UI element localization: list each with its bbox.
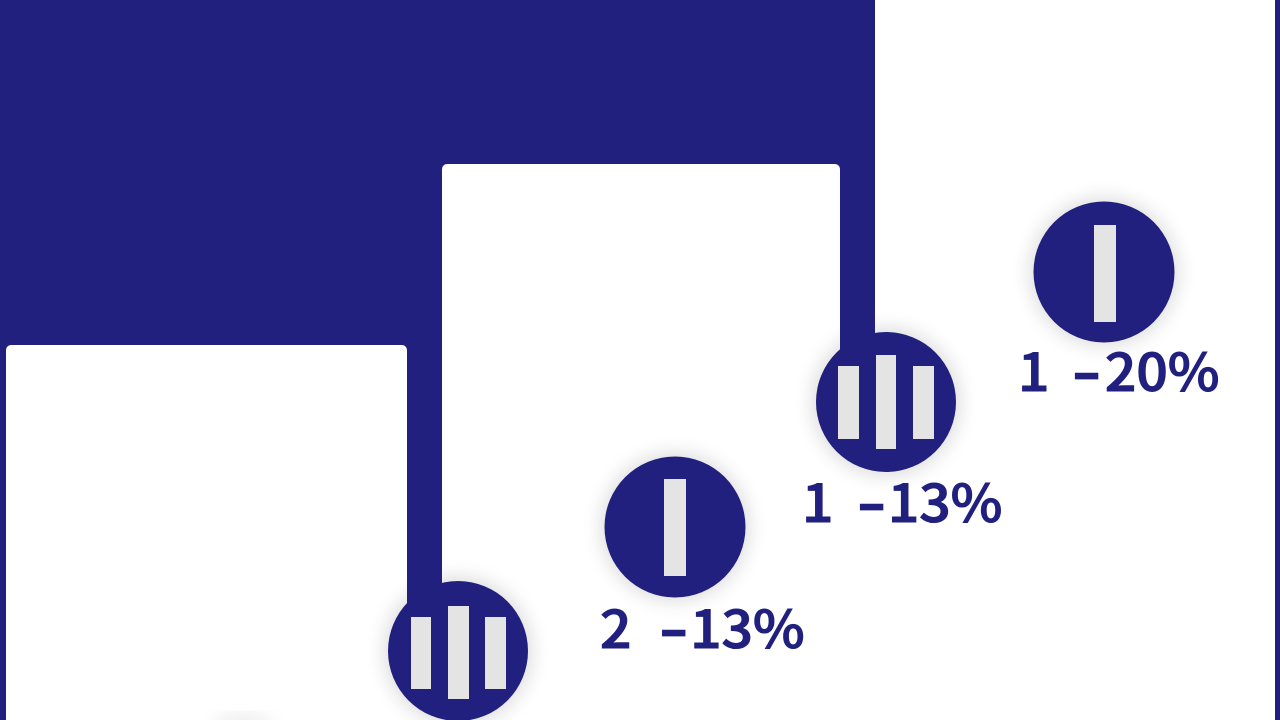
- icon: three bars badge, centre right: [816, 332, 956, 472]
- label: 2 -13%: –: [662, 597, 686, 658]
- label: 1 -13%: –: [860, 471, 884, 532]
- panel: right step: [875, 0, 1275, 720]
- label: 1 -20%: 1: [1018, 332, 1049, 407]
- icon: single bar badge, right: [1034, 202, 1174, 342]
- icon: single bar badge, centre: [604, 456, 746, 598]
- connector stem: left to centre: [407, 340, 442, 630]
- faint shadow at bottom edge: [213, 717, 273, 720]
- panel: centre step: [442, 164, 890, 720]
- icon: three bars badge, left: [388, 581, 528, 720]
- label: 1 -20%: 20%: [1105, 332, 1220, 407]
- panel: left step: [6, 345, 460, 720]
- label: 1 -20%: –: [1075, 340, 1099, 401]
- label: 2 -13%: 2: [600, 589, 631, 664]
- label: 1 -13%: 1: [802, 463, 833, 538]
- circle shadows: [385, 199, 1177, 720]
- label: 1 -13%: 13%: [888, 463, 1002, 538]
- connector stem: centre to right: [840, 160, 875, 370]
- label: 2 -13%: 13%: [690, 589, 805, 664]
